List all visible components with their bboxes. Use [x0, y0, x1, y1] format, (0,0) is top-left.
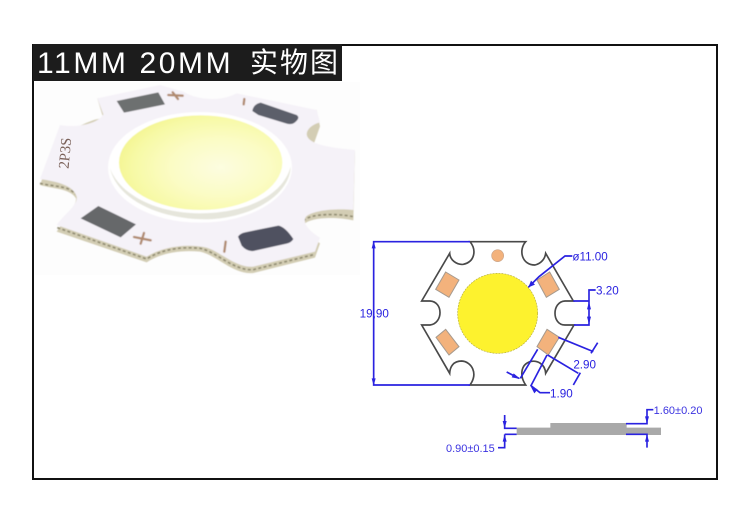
- dimension arrows: [372, 241, 591, 393]
- technical drawing: top view: [360, 241, 619, 401]
- dimension lines: [498, 410, 653, 448]
- board top surface: [40, 85, 355, 267]
- dimension labels: [360, 251, 619, 401]
- white encapsulation ring: [108, 112, 292, 223]
- solder pad: bottom left: [81, 206, 136, 237]
- polarity marks: [134, 92, 244, 252]
- hexagonal board outline: [422, 242, 574, 385]
- technical drawing: side view: [446, 405, 702, 455]
- dimension labels: ø11.00: [572, 251, 608, 264]
- board edge: [40, 98, 355, 273]
- title bar: [33, 44, 342, 81]
- dimension labels: [446, 405, 702, 455]
- yellow phosphor disc: [119, 115, 282, 210]
- dimension labels: 1.60±0.20: [654, 405, 702, 417]
- dimension labels: 3.20: [596, 285, 619, 298]
- dimension lines: [374, 242, 598, 393]
- solder pad: top right: [252, 103, 298, 124]
- dimension labels: 0.90±0.15: [446, 443, 495, 455]
- board edge texture: [40, 183, 353, 270]
- dimension labels: 1.90: [550, 388, 573, 401]
- yellow emitter circle: [458, 273, 538, 353]
- board profile: [517, 423, 661, 435]
- title bar: 实物图: [250, 47, 340, 78]
- frame: [33, 45, 717, 479]
- copper pads: [436, 272, 559, 355]
- dimension labels: 2.90: [573, 358, 597, 371]
- photo: LED COB board: [35, 82, 360, 275]
- dimension labels: 19,90: [360, 307, 389, 320]
- solder pad: bottom right: [238, 226, 293, 251]
- title bar: 11MM 20MM: [37, 47, 233, 80]
- solder pad: top left: [117, 92, 165, 113]
- top marker dot: [492, 250, 504, 262]
- dimension arrows: [503, 416, 649, 442]
- board marking: 2P3S: [57, 137, 75, 169]
